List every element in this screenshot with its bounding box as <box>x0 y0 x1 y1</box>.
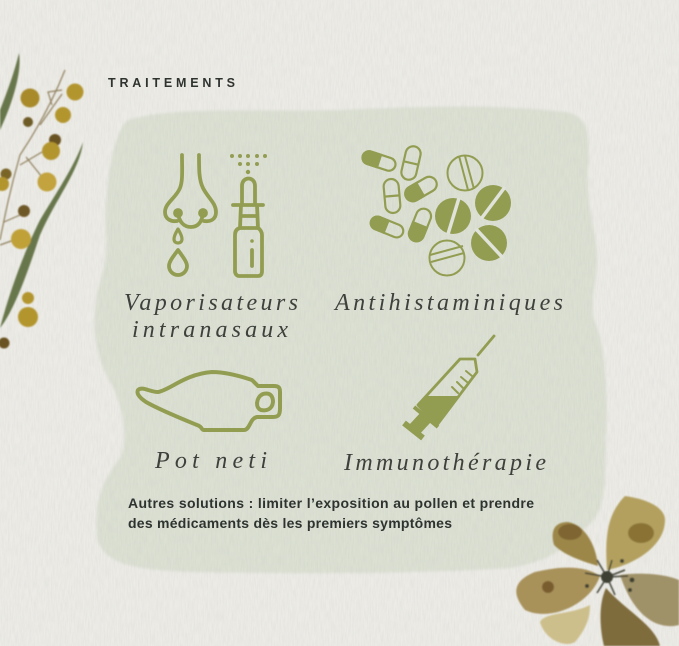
stems <box>0 70 65 245</box>
capsules <box>361 145 439 244</box>
icon: nasal spray bottle <box>230 154 267 276</box>
barrel <box>418 336 494 425</box>
label: pot neti: Pot neti <box>154 448 267 474</box>
plunger <box>408 412 431 436</box>
label: vaporisateurs intranasaux: Vaporisateurs <box>124 290 298 316</box>
blossoms <box>0 84 84 348</box>
plunger cap <box>404 423 423 438</box>
text block: autres solutions <box>128 495 534 531</box>
icon: nose with drops <box>165 155 216 275</box>
leaves <box>0 53 83 328</box>
label: antihistaminiques: Antihistaminiques <box>333 290 563 316</box>
label: vaporisateurs intranasaux <box>124 290 298 343</box>
text block: autres solutions: Autres solutions : limiter l’exposition au pollen et prendre <box>128 495 534 511</box>
title: TRAITEMENTS <box>108 76 235 90</box>
flange <box>414 407 438 427</box>
panel: watercolour background <box>94 106 607 573</box>
icon: neti pot <box>137 372 280 430</box>
illustration: mimosa branch <box>0 53 84 348</box>
tablets <box>448 156 482 190</box>
text block: autres solutions: des médicaments dès les premiers symptômes <box>128 515 452 531</box>
label: immunothérapie: Immunothérapie <box>343 450 546 476</box>
label: vaporisateurs intranasaux: intranasaux <box>132 317 288 343</box>
illustration: dried flower <box>516 496 679 646</box>
icon: pills <box>361 145 511 276</box>
petals <box>606 496 665 570</box>
fill <box>418 396 458 425</box>
icon: syringe <box>404 336 494 438</box>
